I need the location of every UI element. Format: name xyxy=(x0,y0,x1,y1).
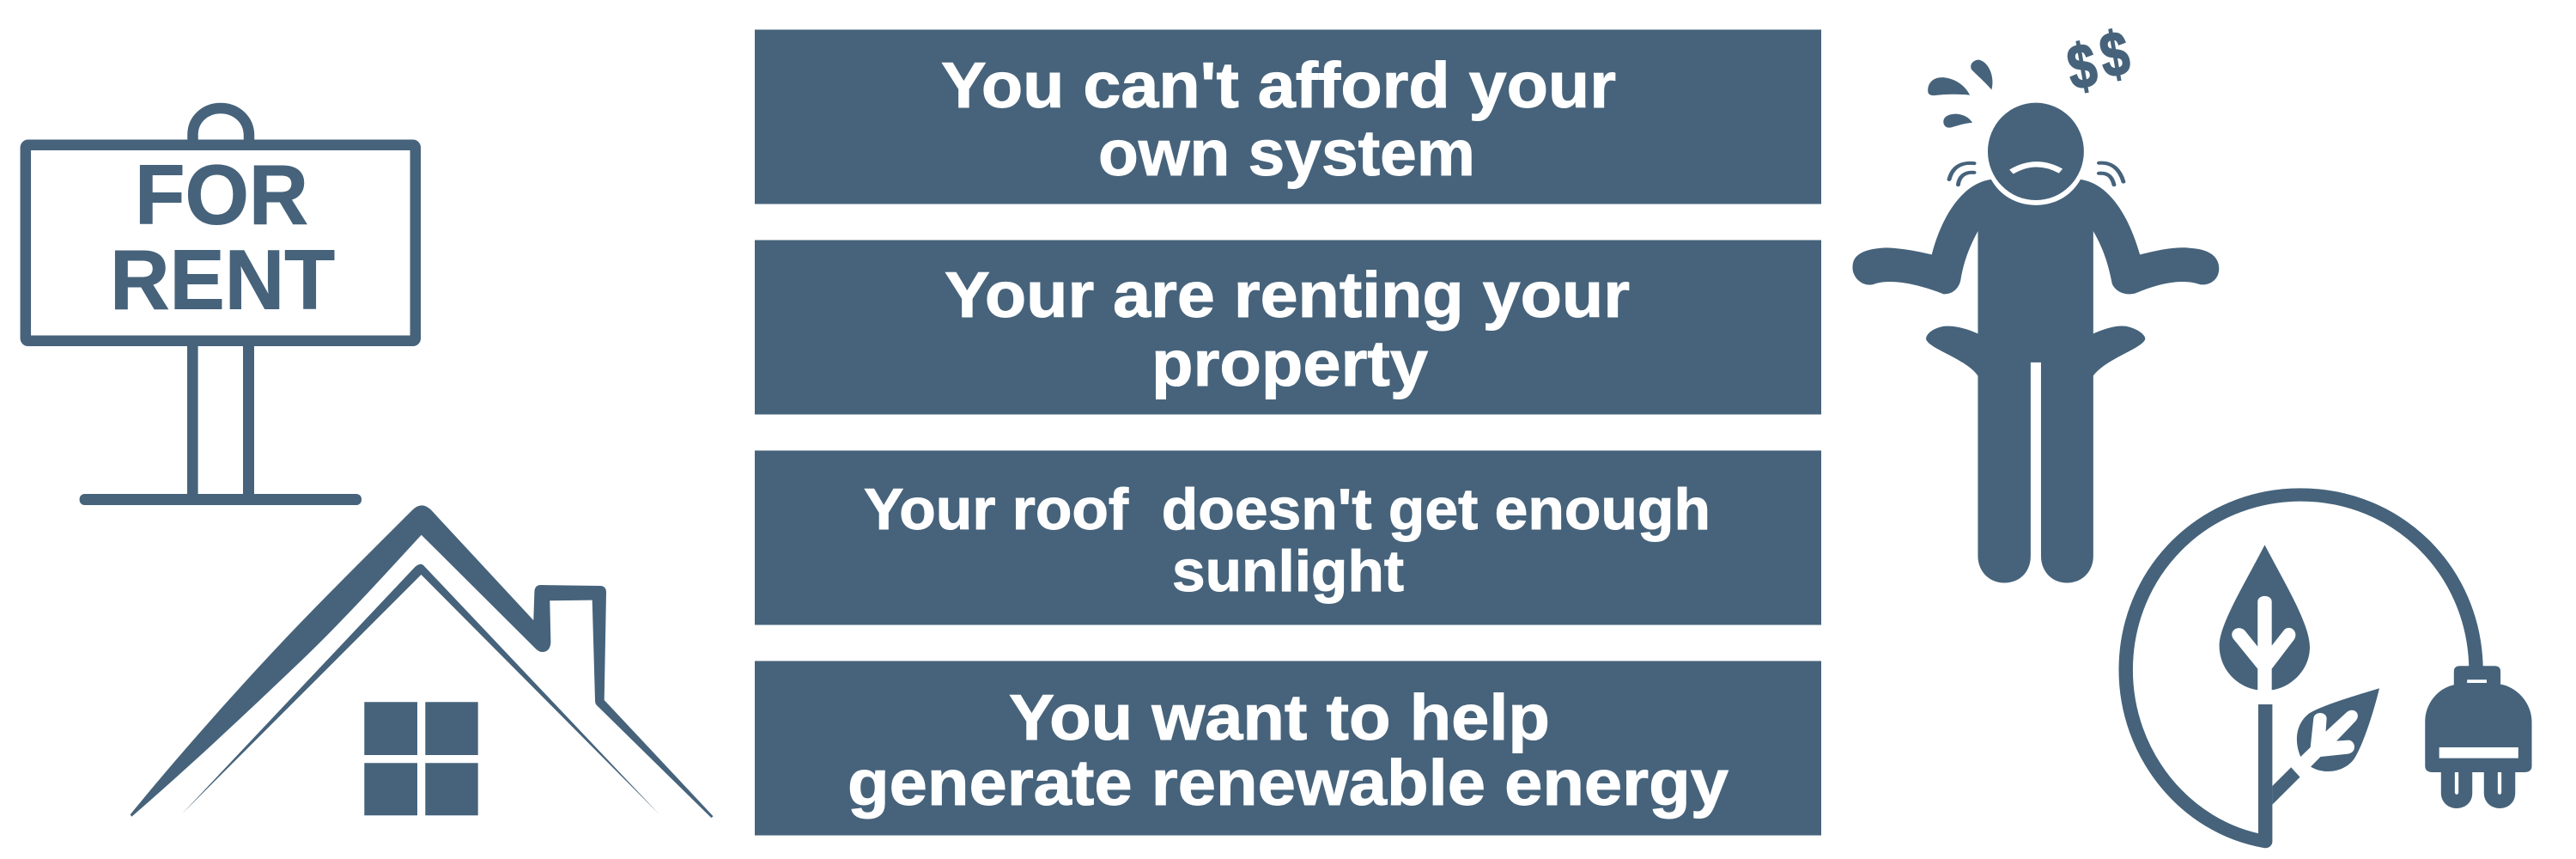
panel text line 1: Your roof doesn't get enough xyxy=(864,477,1710,542)
cord and stem xyxy=(2126,495,2476,842)
panel text line 1: Your are renting your xyxy=(945,259,1630,331)
icon: plant with plug xyxy=(2126,495,2532,842)
inner roof line xyxy=(182,564,660,815)
frown xyxy=(2011,164,2061,172)
panel: renting xyxy=(755,241,1821,414)
panel text line 2: sunlight xyxy=(1172,539,1404,604)
sign base xyxy=(80,494,361,505)
sign posts xyxy=(187,346,254,495)
icon: dollar signs: $ xyxy=(2063,30,2102,104)
panel text line 1: You can't afford your xyxy=(941,49,1616,121)
sign hook xyxy=(192,108,249,140)
outer roof with chimney xyxy=(131,505,714,818)
panel text line 1: You want to help xyxy=(1009,681,1550,753)
icon: dollar signs: $ xyxy=(2095,18,2135,92)
sign text: rent: RENT xyxy=(110,232,335,326)
sweat drops xyxy=(1928,60,1992,128)
panel: renewable energy xyxy=(755,661,1821,835)
icon: house roof xyxy=(131,505,714,818)
icon: broke person xyxy=(1852,60,2219,583)
sign board xyxy=(26,145,416,341)
panel: sunlight xyxy=(755,450,1821,625)
panel: can't afford xyxy=(755,29,1821,204)
panel text line 2: own system xyxy=(1098,117,1475,189)
body with empty pockets xyxy=(1852,180,2219,583)
top leaf xyxy=(2220,545,2310,690)
branch xyxy=(2272,767,2300,805)
sign text: for: FOR xyxy=(135,148,308,242)
plug xyxy=(2425,666,2532,808)
plug details xyxy=(2439,679,2518,795)
icon: dollar signs xyxy=(2063,18,2135,104)
panel text line 2: property xyxy=(1151,327,1428,399)
worry lines xyxy=(1949,163,2123,185)
head xyxy=(1988,103,2084,200)
panel text line 2: generate renewable energy xyxy=(848,746,1728,819)
side leaf xyxy=(2297,688,2379,771)
icon: for rent sign xyxy=(26,108,416,505)
window xyxy=(364,702,478,815)
